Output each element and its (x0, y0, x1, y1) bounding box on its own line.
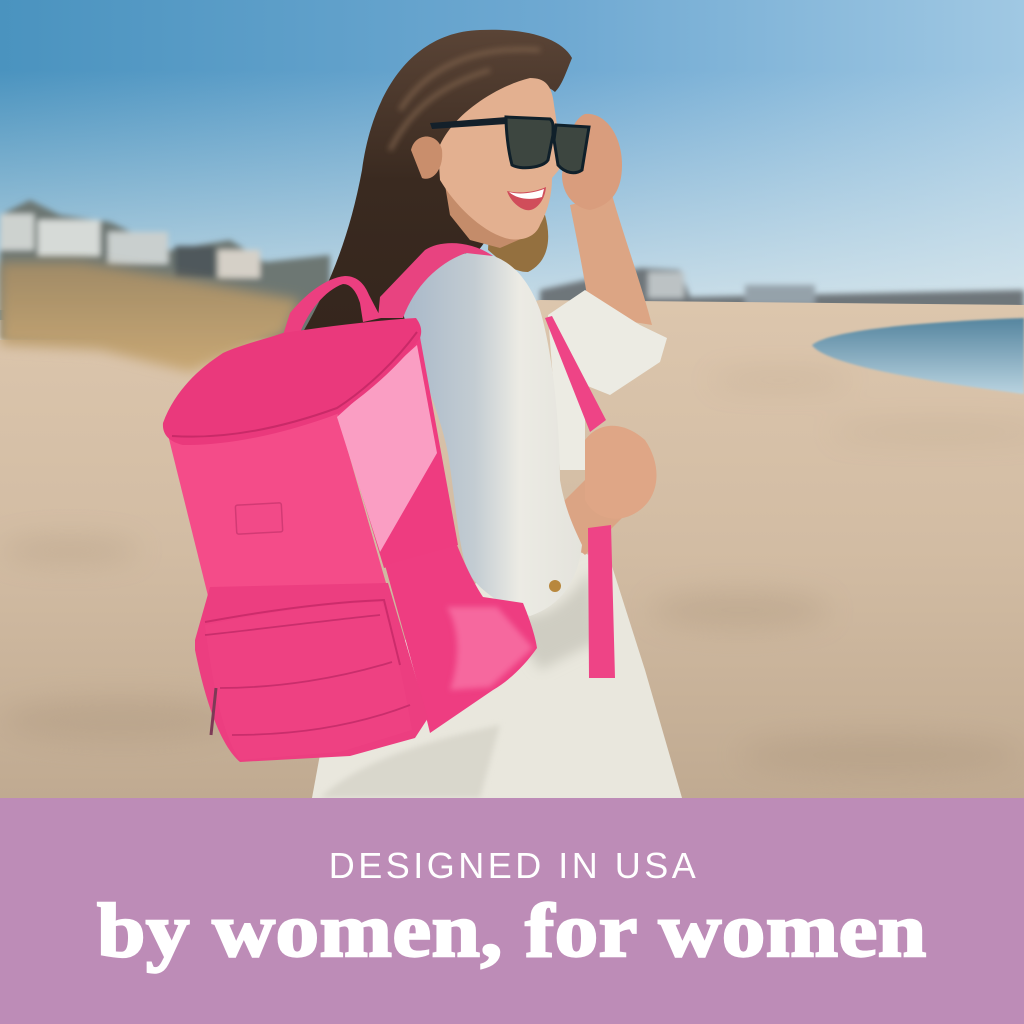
beach sand (0, 300, 1024, 798)
smile (507, 187, 546, 210)
photo: woman on beach with pink backpack (0, 0, 1024, 798)
neck, face and ear (411, 78, 563, 248)
hand holding strap (585, 426, 656, 519)
backpack shoulder strap (378, 243, 493, 318)
pink strap front (545, 316, 615, 678)
backpack handle (283, 276, 381, 335)
side panel (337, 337, 458, 568)
banner subheading: DESIGNED IN USA (329, 845, 699, 886)
hair (303, 30, 572, 332)
hair highlights (390, 49, 540, 150)
logo patch (235, 503, 283, 534)
cuff button (549, 580, 561, 592)
dress lower (312, 540, 682, 798)
shirt torso and sleeve (403, 253, 582, 616)
side pocket (385, 545, 537, 733)
banner headline: by women, for women (97, 889, 927, 973)
dune grass (0, 262, 300, 372)
shirt cuff at raised arm (548, 290, 667, 470)
banner (0, 798, 1024, 1024)
background dunes and houses (0, 200, 1024, 340)
forearm (545, 465, 635, 555)
front pocket panel (205, 602, 412, 760)
ear (411, 136, 442, 179)
hair behind neck (488, 215, 548, 272)
front pocket shell (195, 583, 428, 762)
sky (0, 0, 1024, 320)
body front (168, 413, 388, 612)
raised arm (570, 195, 652, 325)
lid (163, 318, 421, 445)
sand shadows (0, 374, 1024, 775)
hand on sunglasses (562, 114, 622, 210)
sunglasses (430, 117, 589, 173)
backpack (163, 318, 537, 762)
sea (812, 318, 1024, 394)
zipper pull (211, 688, 216, 735)
side panel highlight (337, 345, 437, 552)
side pocket highlight (447, 607, 533, 690)
